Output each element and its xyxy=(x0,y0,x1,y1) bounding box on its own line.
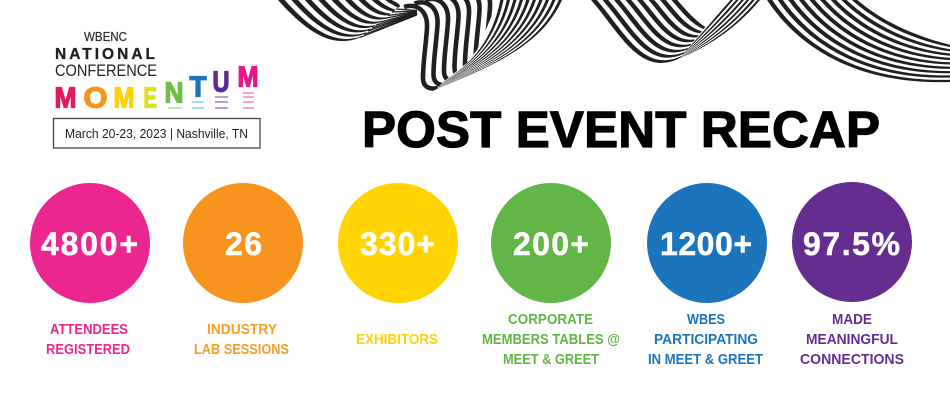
stat: WBEs participating: IN MEET & GREET xyxy=(648,352,763,368)
title: POST EVENT RECAP xyxy=(362,101,880,158)
stat: WBEs participating: 1200+ xyxy=(660,226,752,262)
logo: Momentum wordmark xyxy=(54,62,258,114)
logo: Momentum wordmark: O xyxy=(84,82,108,114)
stat: corporate tables xyxy=(482,183,620,368)
stat: attendees: 4800+ xyxy=(41,226,139,262)
stat: corporate tables: MEET & GREET xyxy=(503,352,599,368)
stat: lab sessions: INDUSTRY xyxy=(207,322,277,338)
conference logo xyxy=(54,30,260,148)
ribbon: right-centre fold xyxy=(680,0,760,58)
logo: National: NATIONAL xyxy=(55,46,155,63)
logo: date text: March 20-23, 2023 | Nashville, TN xyxy=(65,126,248,141)
stat: attendees xyxy=(30,183,150,358)
ribbon: right tail xyxy=(767,0,950,82)
logo: Momentum wordmark: M xyxy=(54,82,76,114)
stat: corporate tables: MEMBERS TABLES @ xyxy=(482,332,620,348)
ribbon: left fold xyxy=(360,9,417,38)
logo: wordmark underlines xyxy=(168,93,254,108)
stat: exhibitors: 330+ xyxy=(360,226,435,262)
stat: corporate tables: 200+ xyxy=(513,226,589,262)
stat: lab sessions xyxy=(183,183,303,358)
logo: Momentum wordmark: M xyxy=(114,82,134,114)
stat: WBEs participating xyxy=(647,183,767,368)
logo: Momentum wordmark: T xyxy=(190,72,207,104)
logo: Momentum wordmark: M xyxy=(238,62,258,94)
stat: meaningful connections: MADE xyxy=(832,312,872,328)
stat: meaningful connections: CONNECTIONS xyxy=(800,352,904,368)
ribbon: central vertical band xyxy=(404,0,501,89)
stat: lab sessions: 26 xyxy=(225,226,262,262)
stat: WBEs participating: PARTICIPATING xyxy=(654,332,758,348)
logo: date box xyxy=(54,118,260,148)
logo: WBENC: WBENC xyxy=(84,30,127,44)
stat: attendees: ATTENDEES xyxy=(50,322,128,338)
stat: lab sessions: LAB SESSIONS xyxy=(194,342,289,358)
logo: Momentum wordmark: N xyxy=(164,78,184,110)
stat: meaningful connections xyxy=(792,182,912,368)
stat: meaningful connections: 97.5% xyxy=(803,226,900,262)
ribbon: right-centre wave xyxy=(591,0,705,63)
stat: attendees: REGISTERED xyxy=(46,342,130,358)
logo: Momentum wordmark: E xyxy=(144,82,157,114)
ribbon: central fold xyxy=(437,0,562,89)
stat: WBEs participating: WBES xyxy=(687,312,725,328)
ribbon: left wave xyxy=(278,0,400,41)
logo: Conference: CONFERENCE xyxy=(55,62,157,80)
stat: exhibitors: EXHIBITORS xyxy=(356,332,438,348)
striped ribbon graphic xyxy=(278,0,950,89)
stat: meaningful connections: MEANINGFUL xyxy=(806,332,898,348)
stat: exhibitors xyxy=(338,183,458,348)
logo: Momentum wordmark: U xyxy=(212,66,230,98)
stat: corporate tables: CORPORATE xyxy=(508,312,593,328)
